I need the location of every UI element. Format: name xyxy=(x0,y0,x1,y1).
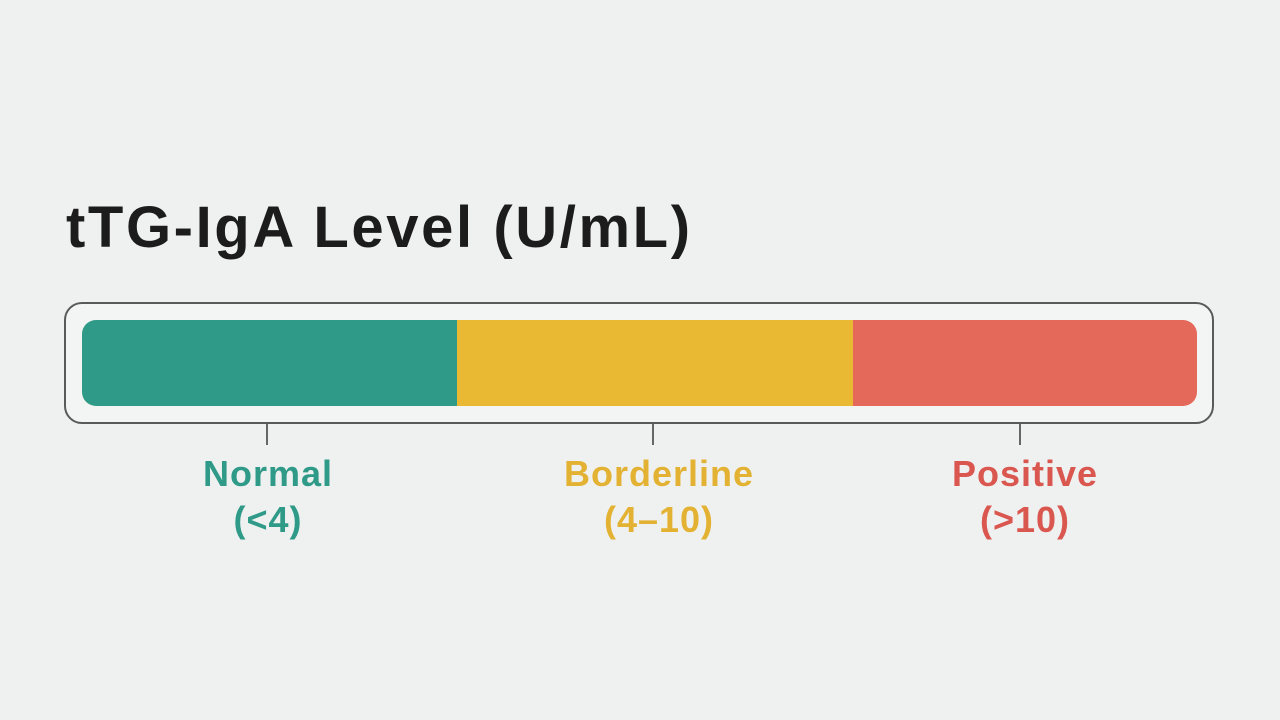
segment: borderline xyxy=(457,320,853,406)
label: positive: (>10) xyxy=(980,499,1070,540)
tick: positive xyxy=(1019,424,1021,445)
label: normal xyxy=(203,453,333,540)
label: normal: (<4) xyxy=(233,499,303,540)
tick: borderline xyxy=(652,424,654,445)
tick: normal xyxy=(266,424,268,445)
label: borderline: Borderline xyxy=(564,453,754,494)
label: normal: Normal xyxy=(203,453,333,494)
scale frame xyxy=(64,302,1214,424)
title: tTG-IgA Level (U/mL) xyxy=(66,195,693,260)
label: borderline: (4–10) xyxy=(604,499,714,540)
segment: positive xyxy=(853,320,1197,406)
label: positive xyxy=(952,453,1098,540)
label: positive: Positive xyxy=(952,453,1098,494)
segment: normal xyxy=(82,320,457,406)
label: borderline xyxy=(564,453,754,540)
color scale bar xyxy=(82,320,1197,406)
